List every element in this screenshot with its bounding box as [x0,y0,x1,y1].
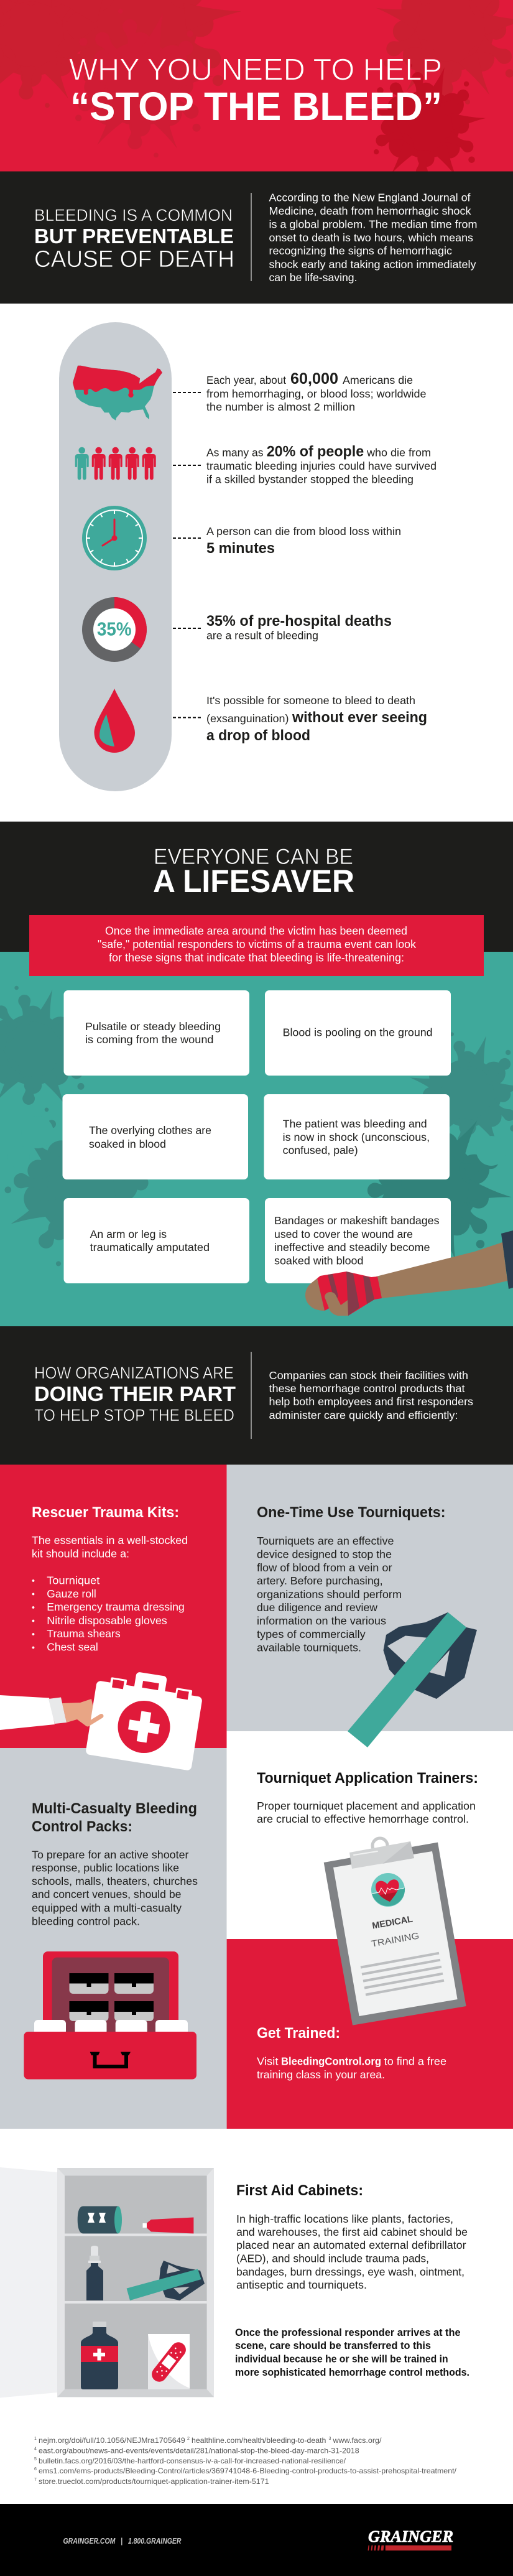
panel: one-time use tourniquets [227,1464,513,1731]
footnote sources: www.facs.org/ [332,2436,382,2445]
text block: device designed to stop the [257,1548,392,1560]
card: soaked clothes: The overlying clothes are [89,1124,211,1137]
callout: red intro banner: Once the immediate area around the victim has been deemed [105,924,407,937]
text block: placed near an automated external defibrillator [236,2239,466,2251]
callout: red intro banner [29,915,484,976]
text block: Proper tourniquet placement and application [257,1800,476,1812]
text block: to find a free [384,2055,446,2068]
text block: bandages, burn dressings, eye wash, ointment, [236,2266,464,2278]
heading: A LIFESAVER [153,863,354,899]
card: patient in shock: The patient was bleeding and [283,1118,427,1130]
text block: To prepare for an active shooter [32,1849,189,1861]
stat: 60,000 Americans: Each year, about [206,374,286,386]
text block: and warehouses, the first aid cabinet should be [236,2226,468,2238]
stat: bleed without a drop of blood: (exsanguination) [206,712,289,725]
footnote sources: 5 [34,2457,37,2462]
icon: US map bleeding [73,366,162,421]
card: patient in shock: confused, pale) [283,1144,358,1156]
text block: available tourniquets. [257,1641,361,1653]
panel: statistics pill [59,322,172,791]
footnote sources: ems1.com/ems-products/Bleeding-Control/articles/369741048-6-Bleeding-control-products-to-assist-prehospital-treatment/ [39,2467,457,2475]
ointment tube [143,2217,193,2233]
heading [34,206,234,272]
text block: flow of blood from a vein or [257,1561,392,1574]
panel: get trained [227,1939,513,2129]
heading: Tourniquet Application Trainers: [257,1770,478,1787]
paragraph: these hemorrhage control products that [269,1382,465,1395]
connector [173,537,201,539]
text block: BleedingControl.org [281,2055,381,2068]
text block: The essentials in a well-stocked [32,1534,188,1546]
footnote sources: 4 [34,2447,37,2451]
clipboard text: MEDICAL [371,1914,414,1932]
card: ineffective bandages: used to cover the wound are [274,1228,413,1240]
text block: Visit [257,2055,279,2068]
bold callout: scene, care should be transferred to this [235,2340,431,2351]
footnote sources: healthline.com/health/bleeding-to-death [192,2436,326,2445]
intro paragraph: According to the New England Journal of [269,192,471,204]
title: “STOP THE BLEED” [70,84,442,129]
card: amputated limb: An arm or leg is [90,1228,167,1240]
bullet list [32,1574,185,1653]
connector [173,465,201,466]
stat: 35 percent deaths: are a result of bleeding [206,630,318,642]
clipboard text [371,1914,420,1950]
mini tourniquet [127,2261,205,2300]
footnote sources: 1 [34,2437,37,2441]
icon: bleeding control pack [24,1951,196,2079]
intro paragraph: onset to death is two hours, which means [269,231,473,244]
text block: organizations should perform [257,1588,402,1601]
panel: first aid cabinets text [235,2182,469,2378]
text block [257,1535,402,1653]
bullet list: Tourniquet [47,1574,99,1586]
footnote sources: 3 [328,2437,331,2441]
text block: Tourniquets are an effective [257,1535,394,1547]
stat: 60,000 Americans: the number is almost 2 million [206,401,355,413]
text block [257,1800,476,1825]
blood splatter background [0,0,513,184]
teal splatter background [0,986,513,1296]
card: ineffective bandages: ineffective and steadily become [274,1241,430,1253]
card: patient in shock [264,1094,450,1179]
footnote sources: 7 [34,2478,37,2482]
panel: everyone can be a lifesaver header [0,822,513,952]
heading: BLEEDING IS A COMMON [34,206,233,225]
text block: (AED), and should include trauma pads, [236,2252,429,2264]
stat: bleed without a drop of blood: without ever seeing [292,709,427,726]
paragraph: Companies can stock their facilities with [269,1369,468,1382]
intro paragraph: is a global problem. The median time from [269,218,478,230]
footnote sources: store.trueclot.com/products/tourniquet-application-trainer-item-5171 [39,2477,269,2486]
card: pooling blood: Blood is pooling on the ground [283,1026,433,1039]
stat: 35 percent deaths: 35% of pre-hospital deaths [206,613,392,630]
panel: warning signs teal background [0,952,513,1326]
text block: are crucial to effective hemorrhage control. [257,1813,469,1825]
clipboard text: TRAINING [371,1931,420,1950]
stat: 20% of people: traumatic bleeding injuries could have survived [206,460,437,472]
connector [173,392,201,393]
icon: first aid cabinet [0,2167,214,2397]
paragraph [269,1369,473,1421]
panel: rescuer trauma kits [0,1464,227,1748]
stat: 60,000 Americans: 60,000 [290,370,338,388]
card: amputated limb: traumatically amputated [90,1241,210,1253]
stat: 20% of people [206,443,437,485]
bullet list: Emergency trauma dressing [47,1601,185,1613]
intro paragraph: can be life-saving. [269,271,357,284]
stat: bleed without a drop of blood [206,694,427,744]
icon: 35 percent donut chart: 35% [97,618,132,639]
text block: training class in your area. [257,2068,385,2081]
footer [0,2504,513,2576]
heading: EVERYONE CAN BE [154,845,353,869]
bold callout: Once the professional responder arrives at the [235,2327,461,2338]
heading: One-Time Use Tourniquets: [257,1504,445,1521]
intro paragraph [269,192,478,284]
heading: Rescuer Trauma Kits: [32,1504,179,1521]
heading: HOW ORGANIZATIONS ARE [34,1364,234,1382]
heading: BUT PREVENTABLE [34,225,234,248]
icon: bandaged arm [305,1230,513,1316]
panel: multi-casualty bleeding control packs [0,1748,227,2129]
card: pooling blood [265,990,451,1076]
card: ineffective bandages [265,1198,451,1283]
stat: 35 percent deaths [206,613,392,642]
heading: Control Packs: [32,1818,132,1835]
card: pulsatile bleeding [63,990,249,1076]
card: amputated limb [63,1198,249,1283]
footnote sources [34,2436,457,2486]
card: pulsatile bleeding: Pulsatile or steady bleeding [85,1020,221,1033]
icon: blood drop [94,689,135,753]
panel: hero header [0,0,513,184]
footnote sources: 2 [187,2437,190,2441]
card: pulsatile bleeding: is coming from the wound [85,1033,214,1046]
footnote sources: bulletin.facs.org/2016/03/the-hartford-consensus-iv-a-call-for-increased-national-resilience/ [39,2457,346,2465]
text block: equipped with a multi-casualty [32,1902,182,1914]
text block: response, public locations like [32,1861,179,1874]
bullet list: Gauze roll [47,1588,96,1600]
heading: Multi-Casualty Bleeding [32,1800,197,1817]
icon: 35 percent donut chart [82,597,147,662]
heading: Get Trained: [257,2025,340,2042]
bandage roll [78,2206,122,2233]
stat: 5 minutes [206,525,401,557]
panel: how organizations are doing their part [0,1326,513,1464]
heading: TO HELP STOP THE BLEED [34,1406,234,1425]
intro paragraph: shock early and taking action immediately [269,258,476,271]
text block [236,2213,468,2291]
heading: First Aid Cabinets: [236,2182,363,2199]
stat: bleed without a drop of blood: It's possible for someone to bleed to death [206,694,415,707]
stat: 20% of people: As many as [206,447,264,459]
footnote sources: east.org/about/news-and-events/events/detail/281/national-stop-the-bleed-day-march-31-2018 [39,2446,359,2455]
contact line: GRAINGER.COM | 1.800.GRAINGER [63,2536,182,2546]
text block: In high-traffic locations like plants, factories, [236,2213,453,2225]
heading: DOING THEIR PART [34,1382,236,1405]
intro paragraph: recognizing the signs of hemorrhagic [269,244,452,257]
bandage box [148,2334,190,2389]
callout: red intro banner: "safe," potential responders to victims of a trauma event can look [98,937,417,951]
heart badge [371,1873,405,1907]
stat: 20% of people: who die from [366,447,431,459]
dropper bottle [86,2246,103,2300]
icon: hand holding first aid kit [0,1672,203,1771]
callout: red intro banner: for these signs that indicate that bleeding is life-threatening: [109,951,404,964]
text block: information on the various [257,1615,386,1627]
title [69,53,442,129]
stat: 5 minutes: 5 minutes [206,540,275,557]
footnote sources: 6 [34,2467,37,2471]
intro paragraph: Medicine, death from hemorrhagic shock [269,205,471,217]
stat: 5 minutes: A person can die from blood loss within [206,525,401,537]
bold callout: more sophisticated hemorrhage control methods. [235,2366,469,2378]
stat: 60,000 Americans: from hemorrhaging, or blood loss; worldwide [206,388,427,400]
text block: types of commercially [257,1628,366,1640]
text block: schools, malls, theaters, churches [32,1875,198,1887]
text block: and concert venues, should be [32,1888,182,1900]
text block: artery. Before purchasing, [257,1574,383,1587]
icon: clock [82,506,147,570]
bold callout [235,2327,469,2378]
bullet list: Trauma shears [47,1627,121,1640]
footnote sources: nejm.org/doi/full/10.1056/NEJMra1705649 [39,2436,185,2445]
cabinet door [0,2167,57,2397]
paragraph: administer care quickly and efficiently: [269,1409,458,1421]
icon: tourniquet [348,1612,477,1747]
bullet list: Nitrile disposable gloves [47,1614,167,1627]
text block: kit should include a: [32,1548,129,1560]
connector [173,628,201,629]
icon: five people [75,447,156,480]
connector [173,717,201,718]
stat: 20% of people: if a skilled bystander stopped the bleeding [206,473,414,485]
text block: bleeding control pack. [32,1915,140,1927]
paragraph: help both employees and first responders [269,1395,473,1408]
icon: medical training clipboard [324,1838,466,2025]
antiseptic bottle [81,2322,118,2389]
panel: bleeding is preventable intro [0,172,513,304]
text block [32,1534,188,1560]
stat: bleed without a drop of blood: a drop of blood [206,727,310,744]
stat: 60,000 Americans [206,370,427,413]
card: ineffective bandages: Bandages or makeshift bandages [274,1214,440,1227]
card: patient in shock: is now in shock (unconscious, [283,1131,430,1143]
heading: CAUSE OF DEATH [34,246,234,272]
heading [34,1364,236,1425]
bold callout: individual because he or she will be trained in [235,2353,448,2365]
heading [32,1800,197,1835]
card: soaked clothes [62,1094,248,1179]
panel: tourniquet application trainers [227,1731,513,1939]
Grainger logo: GRAINGER [368,2527,453,2546]
text block: antiseptic and tourniquets. [236,2279,367,2291]
card: soaked clothes: soaked in blood [89,1138,166,1150]
text block [257,2055,446,2081]
heading [153,845,354,899]
card: ineffective bandages: soaked with blood [274,1255,363,1267]
bullet list: Chest seal [47,1641,98,1653]
title: WHY YOU NEED TO HELP [69,53,442,87]
text block: due diligence and review [257,1601,377,1614]
text block [32,1849,198,1927]
stat: 60,000 Americans: Americans die [343,374,413,386]
stat: 20% of people: 20% of people [267,443,364,460]
